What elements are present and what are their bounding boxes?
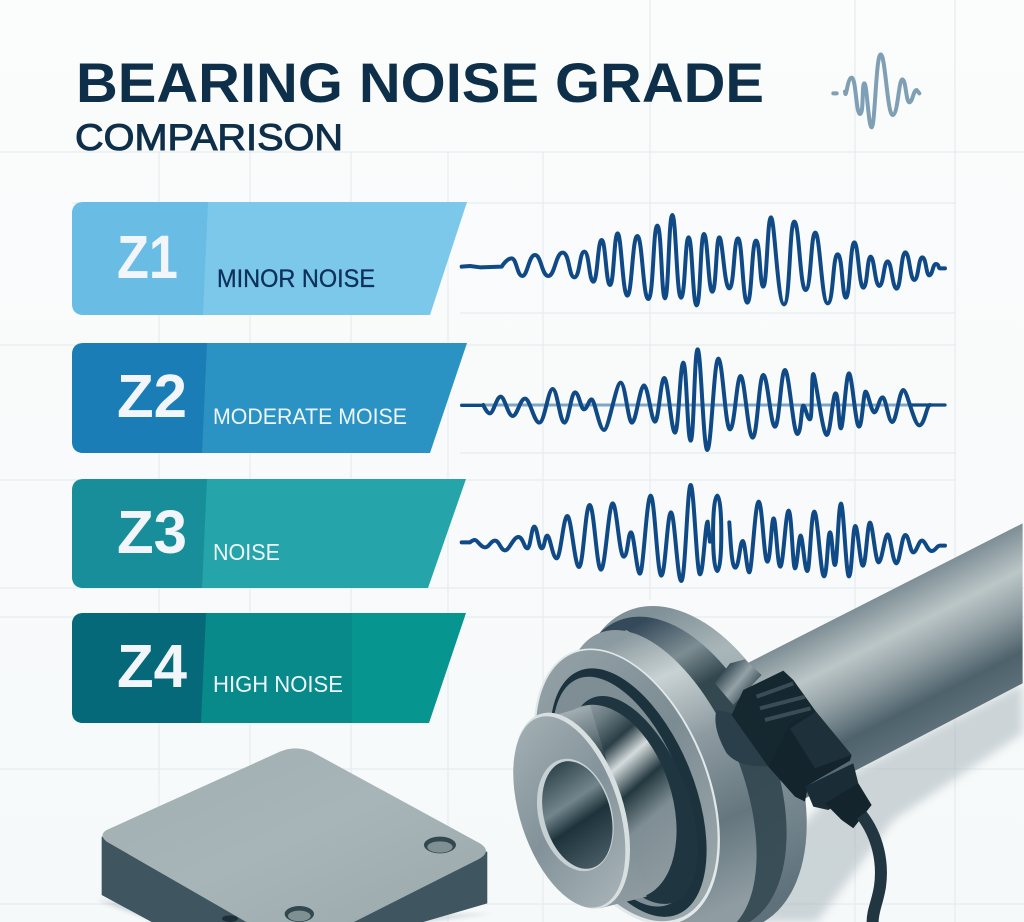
heading: bearing noise grade: BEARING NOISE GRADE [76, 51, 764, 114]
soft shadow under hardware [713, 683, 1023, 922]
chart: Z1 waveform [462, 215, 945, 305]
mounting hole right [424, 837, 456, 853]
grade label Z1: Z1 [117, 223, 178, 291]
hex body [768, 712, 852, 802]
top face [102, 748, 486, 922]
subheading: comparison: COMPARISON [75, 117, 343, 158]
strain relief [825, 783, 872, 828]
front face [491, 698, 652, 922]
title [75, 51, 764, 158]
description: noise: NOISE [213, 539, 280, 565]
pin [715, 659, 762, 705]
grade label Z3: Z3 [117, 498, 187, 566]
description: minor noise: MINOR NOISE [217, 265, 375, 293]
grade label Z2: Z2 [117, 362, 187, 430]
icon: small sound wave [833, 54, 919, 127]
collar [805, 763, 860, 810]
bore [525, 750, 626, 880]
bearing housing [500, 606, 807, 922]
panel: Z1 minor noise [72, 202, 467, 315]
grade label Z4: Z4 [117, 632, 187, 700]
inner ring [491, 688, 700, 922]
icon: bearing with sensor on shaft [491, 523, 1023, 922]
panel: Z3 noise [72, 479, 466, 588]
mount [715, 710, 768, 766]
cable [862, 815, 881, 922]
side faces [102, 837, 487, 922]
slot [222, 915, 238, 922]
description: high noise: HIGH NOISE [213, 671, 343, 697]
ribbed body [732, 671, 816, 767]
sensor connector [715, 659, 881, 922]
chart: Z3 waveform [462, 485, 945, 581]
panel: Z2 moderate noise [72, 343, 467, 453]
icon: sensor plate [97, 748, 493, 922]
panel: Z4 high noise [72, 613, 466, 723]
shaft [733, 523, 1023, 820]
mounting hole front [285, 906, 314, 922]
chart: Z2 waveform [462, 349, 945, 450]
description: moderate moise: MODERATE MOISE [213, 404, 407, 429]
